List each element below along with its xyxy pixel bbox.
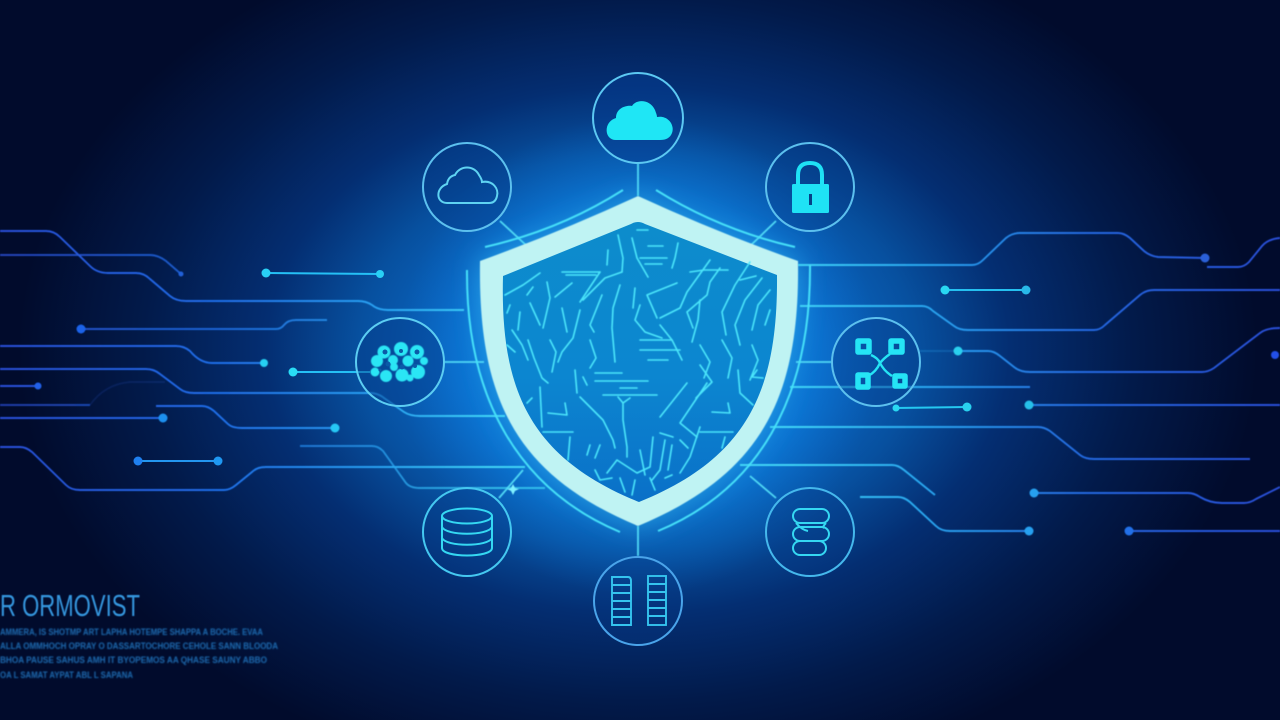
caption heading: R ORMOVIST xyxy=(0,588,140,623)
icon: network nodes xyxy=(832,318,920,406)
icon: server racks xyxy=(594,557,682,645)
icon: top solid cloud xyxy=(593,73,683,163)
icon: outline cloud xyxy=(423,143,511,231)
caption body: AMMERA, IS SHOTMP ART LAPHA HOTEMPE SHAPPA A BOCHE. EVAA xyxy=(0,627,263,638)
right endpoint dots xyxy=(954,254,1279,536)
left circuit lines xyxy=(0,231,545,490)
icon: database right xyxy=(766,488,854,576)
shield interior xyxy=(503,222,777,502)
left endpoint dots xyxy=(34,272,340,432)
bottom-left caption xyxy=(0,588,278,681)
left short bars xyxy=(134,268,384,466)
central halo xyxy=(398,115,878,595)
caption body: OA L SAMAT AYPAT ABL L SAPANA xyxy=(0,670,133,681)
caption body: BHOA PAUSE SAHUS AMH IT BYOPEMOS AA QHASE SAUNY ABBO xyxy=(0,655,267,666)
icon: padlock xyxy=(766,143,854,231)
caption body xyxy=(0,627,278,681)
right short bars xyxy=(892,286,1030,412)
circuit maze xyxy=(505,230,770,495)
connectors from shield to icons xyxy=(444,163,832,556)
spark on lower-left connector xyxy=(507,484,519,495)
shield glow xyxy=(480,196,798,526)
caption body: ALLA OMMHOCH OPRAY O DASSARTOCHORE CEHOLE SANN BLOODA xyxy=(0,641,278,652)
icon: cluster xyxy=(356,318,444,406)
shield xyxy=(480,196,798,526)
icon: database left xyxy=(423,488,511,576)
shield rim xyxy=(480,196,798,526)
shield outer arcs xyxy=(467,190,810,532)
right circuit lines xyxy=(740,233,1280,531)
